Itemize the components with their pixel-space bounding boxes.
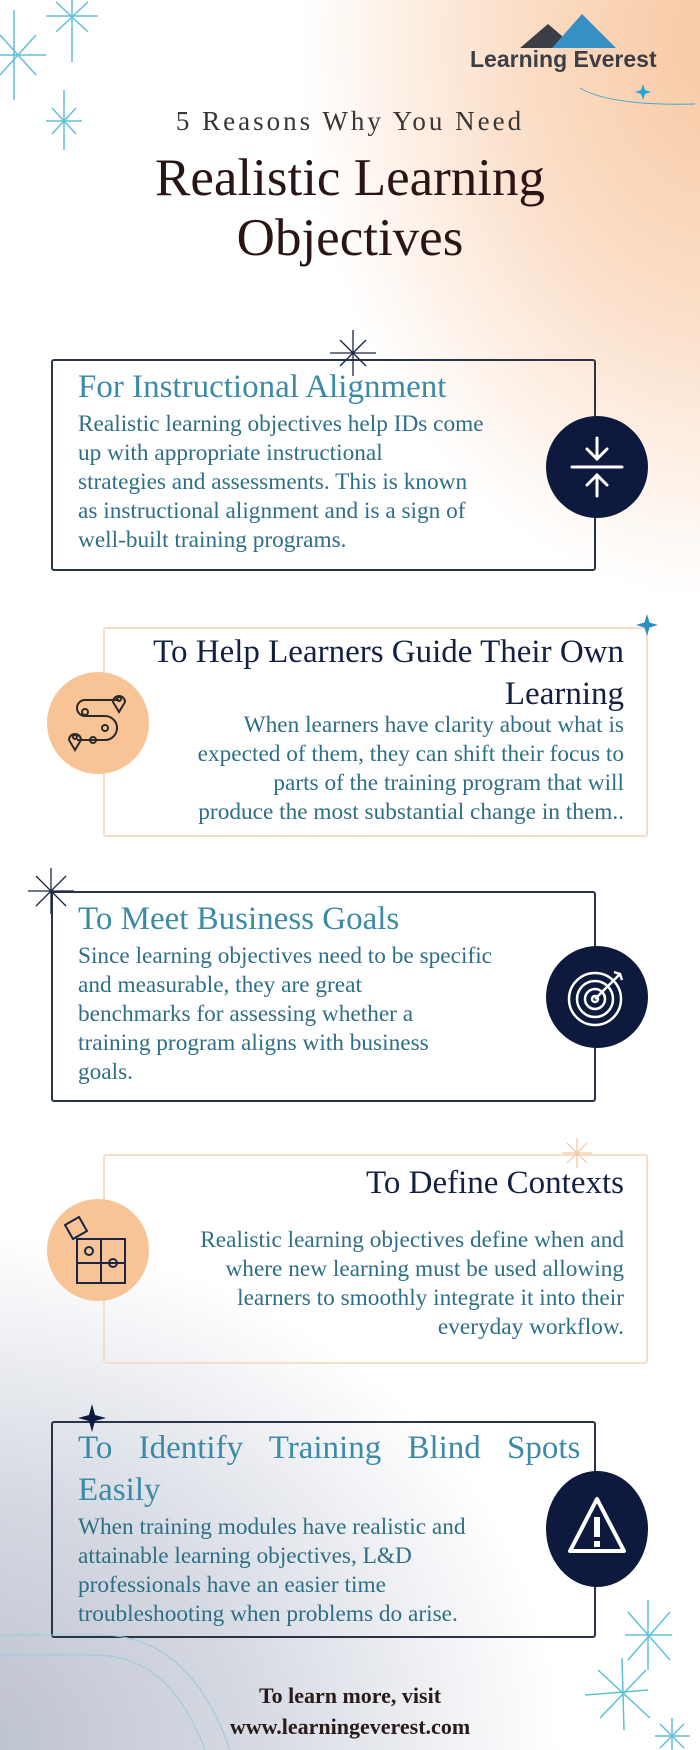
- footer: [230, 1683, 470, 1739]
- logo: Learning Everest: Learning Everest: [470, 46, 657, 72]
- text: When training modules have realistic and: [78, 1514, 466, 1540]
- main title: Objectives: [237, 209, 463, 267]
- text: parts of the training program that will: [273, 770, 624, 796]
- text: benchmarks for assessing whether a: [78, 1001, 413, 1027]
- panel 3: business goals: [51, 891, 596, 1102]
- main title: [155, 149, 545, 267]
- heading: Easily: [78, 1472, 160, 1508]
- panel 2: guide own learning: [103, 627, 648, 837]
- text: where new learning must be used allowing: [225, 1256, 624, 1282]
- text: produce the most substantial change in them..: [198, 799, 624, 825]
- panel 5: blind spots: [51, 1421, 596, 1638]
- decorative sparkles bottom-right and arcs: [0, 1600, 690, 1750]
- main title: Realistic Learning: [155, 149, 545, 207]
- text: Realistic learning objectives define when and: [200, 1227, 624, 1253]
- text: [200, 1227, 624, 1340]
- text: and measurable, they are great: [78, 972, 362, 998]
- text: When learners have clarity about what is: [244, 712, 624, 738]
- text: everyday workflow.: [438, 1314, 624, 1340]
- heading: To Meet Business Goals: [78, 901, 399, 937]
- heading: To Help Learners Guide Their Own: [153, 634, 624, 670]
- icon: warning: [546, 1471, 648, 1587]
- text: strategies and assessments. This is known: [78, 469, 467, 495]
- panel 4: define contexts: [103, 1154, 648, 1364]
- panel 1: instructional alignment: [51, 359, 596, 571]
- text: [198, 712, 624, 825]
- text: expected of them, they can shift their focus to: [198, 741, 624, 767]
- heading: [153, 634, 624, 712]
- heading: For Instructional Alignment: [78, 369, 446, 405]
- decorative sparkles top-left: [0, 0, 98, 150]
- heading: [78, 1430, 580, 1508]
- text: goals.: [78, 1059, 133, 1085]
- text: up with appropriate instructional: [78, 440, 383, 466]
- subtitle: 5 Reasons Why You Need: [176, 106, 524, 136]
- icon: route: [47, 672, 149, 774]
- text: Realistic learning objectives help IDs come: [78, 411, 484, 437]
- text: [78, 943, 492, 1085]
- footer: To learn more, visit: [259, 1683, 441, 1708]
- text: as instructional alignment and is a sign of: [78, 498, 466, 524]
- text: [78, 411, 484, 553]
- text: attainable learning objectives, L&D: [78, 1543, 412, 1569]
- logo: Learning Everest: [470, 14, 695, 105]
- icon: puzzle: [47, 1199, 149, 1301]
- text: well-built training programs.: [78, 527, 347, 553]
- icon: compress arrows: [546, 416, 648, 518]
- icon: target: [546, 946, 648, 1048]
- heading: To Identify Training Blind Spots: [78, 1430, 580, 1466]
- text: [78, 1514, 466, 1627]
- text: troubleshooting when problems do arise.: [78, 1601, 458, 1627]
- text: learners to smoothly integrate it into their: [237, 1285, 624, 1311]
- heading: To Define Contexts: [366, 1165, 624, 1201]
- heading: Learning: [505, 676, 624, 712]
- text: Since learning objectives need to be specific: [78, 943, 492, 969]
- text: professionals have an easier time: [78, 1572, 386, 1598]
- text: training program aligns with business: [78, 1030, 429, 1056]
- footer: www.learningeverest.com: [230, 1714, 470, 1739]
